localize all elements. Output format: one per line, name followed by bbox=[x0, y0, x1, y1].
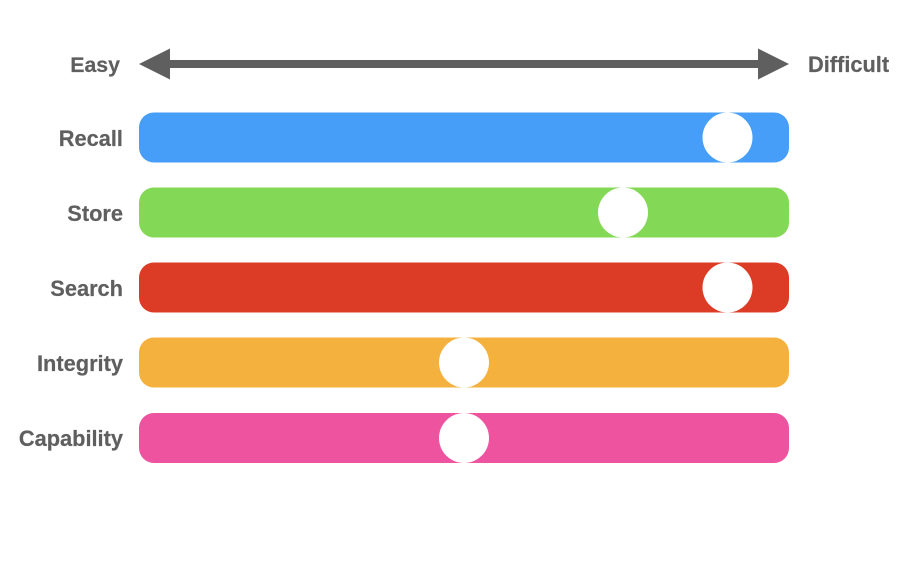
label: Search: Search bbox=[50, 276, 123, 301]
label: Easy: Easy bbox=[70, 53, 120, 77]
row: Store bbox=[67, 188, 789, 238]
label: Integrity: Integrity bbox=[37, 351, 123, 376]
bar: Store bbox=[139, 188, 789, 238]
row: Capability bbox=[19, 413, 789, 463]
double-headed arrow: easy to difficult scale bbox=[139, 48, 789, 80]
label: Capability: Capability bbox=[19, 426, 123, 451]
row: Search bbox=[50, 262, 789, 312]
label: Store: Store bbox=[67, 201, 123, 226]
bar: Capability bbox=[139, 413, 789, 463]
marker: Recall bbox=[702, 112, 752, 162]
bar: Recall bbox=[139, 112, 789, 162]
marker: Integrity bbox=[439, 338, 489, 388]
row: Integrity bbox=[37, 338, 789, 388]
label: Recall: Recall bbox=[59, 126, 123, 151]
label: Difficult: Difficult bbox=[808, 52, 889, 77]
bar: Integrity bbox=[139, 338, 789, 388]
bar: Search bbox=[139, 262, 789, 312]
row: Recall bbox=[59, 112, 789, 162]
marker: Capability bbox=[439, 413, 489, 463]
marker: Search bbox=[702, 262, 752, 312]
marker: Store bbox=[598, 188, 648, 238]
